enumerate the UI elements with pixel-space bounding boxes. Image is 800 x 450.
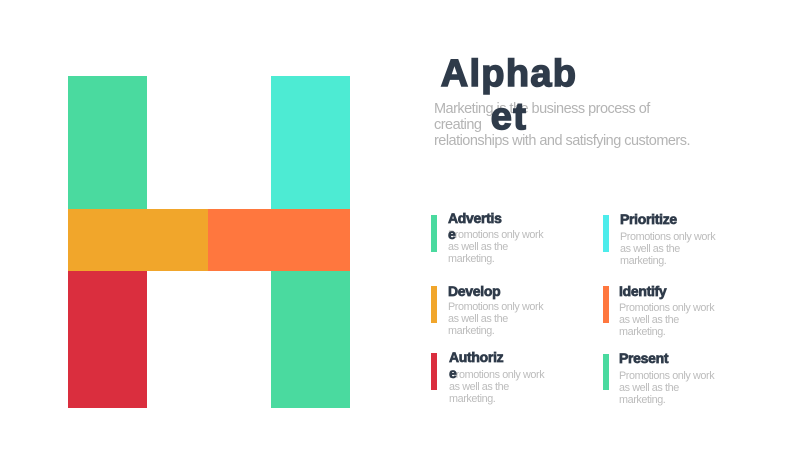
heading: Advertis	[448, 210, 502, 226]
item: Authorize	[431, 349, 544, 405]
marker	[603, 215, 609, 252]
description: Promotions only work	[448, 301, 543, 313]
description: as well as the	[619, 314, 679, 326]
heading	[448, 210, 502, 242]
H segment: top left	[68, 76, 147, 209]
description: Promotions only work	[620, 231, 715, 243]
item: Identify	[603, 283, 714, 338]
title	[440, 53, 577, 138]
title: et	[491, 96, 527, 138]
heading: e	[448, 226, 456, 242]
title: Alphab	[441, 53, 577, 95]
H segment: crossbar left	[68, 209, 208, 271]
description: marketing.	[619, 326, 665, 338]
description: as well as the	[619, 382, 679, 394]
heading	[448, 349, 504, 381]
marker	[431, 286, 437, 323]
item: Advertise	[431, 210, 544, 265]
marker	[431, 353, 437, 390]
description	[620, 231, 716, 267]
description	[449, 369, 544, 405]
heading: Prioritize	[620, 211, 677, 227]
body text: intro: Marketing is the business process of	[434, 101, 650, 117]
H segment: bottom right	[271, 271, 350, 408]
description: marketing.	[448, 253, 494, 265]
body text: intro	[434, 101, 690, 149]
item: Prioritize	[603, 211, 716, 267]
body text: intro: creating	[434, 117, 481, 133]
description	[619, 370, 714, 406]
chart: letter H	[68, 76, 350, 408]
description: marketing.	[619, 394, 665, 406]
heading: Authoriz	[449, 349, 503, 365]
description: Promotions only work	[619, 302, 714, 314]
description: marketing.	[448, 325, 494, 337]
description	[448, 301, 544, 337]
heading: Present	[619, 350, 668, 366]
description: as well as the	[448, 313, 508, 325]
marker	[603, 354, 609, 390]
description: Promotions only work	[449, 369, 544, 381]
H segment: top right	[271, 76, 350, 209]
heading: Identify	[619, 283, 666, 299]
description	[619, 302, 714, 338]
description: marketing.	[449, 393, 495, 405]
H segment: bottom left	[68, 271, 147, 408]
description: as well as the	[449, 381, 509, 393]
heading: Develop	[448, 283, 500, 299]
description: Promotions only work	[619, 370, 714, 382]
heading: e	[449, 365, 456, 381]
description: as well as the	[448, 241, 508, 253]
H segment: crossbar right	[208, 209, 350, 271]
description: marketing.	[620, 255, 666, 267]
item: Present	[603, 350, 714, 406]
description: Promotions only work	[448, 229, 543, 241]
description: as well as the	[620, 243, 680, 255]
item: Develop	[431, 283, 544, 337]
description	[448, 229, 544, 265]
marker	[603, 286, 609, 323]
marker	[431, 215, 437, 252]
body text: intro: relationships with and satisfying customers.	[434, 133, 690, 149]
